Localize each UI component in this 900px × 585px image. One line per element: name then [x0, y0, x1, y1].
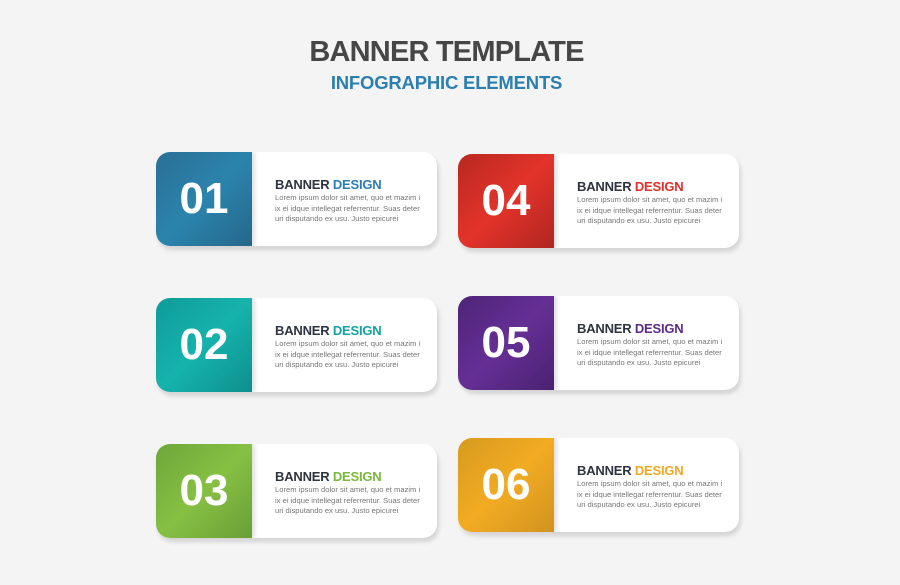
card 02: ix ei idque intellegat referrentur. Suas deter	[275, 350, 420, 358]
card 02: BANNER DESIGN	[275, 323, 381, 338]
card 06: uri disputando ex usu. Justo epicurei	[577, 500, 700, 509]
card 04: uri disputando ex usu. Justo epicurei	[577, 216, 700, 225]
card 04: BANNER DESIGN	[577, 179, 683, 194]
card 04: ix ei idque intellegat referrentur. Suas deter	[577, 206, 722, 214]
card 05: ix ei idque intellegat referrentur. Suas deter	[577, 348, 722, 356]
card 03: ix ei idque intellegat referrentur. Suas deter	[275, 496, 420, 504]
card 06: Lorem ipsum dolor sit amet, quo et mazim i	[577, 479, 722, 488]
card 03: BANNER DESIGN	[275, 469, 381, 484]
card 01: uri disputando ex usu. Justo epicurei	[275, 214, 398, 223]
card 04	[458, 154, 739, 248]
card 03	[156, 444, 437, 538]
card 01	[156, 152, 437, 246]
card 05: Lorem ipsum dolor sit amet, quo et mazim i	[577, 337, 722, 346]
card 03: Lorem ipsum dolor sit amet, quo et mazim i	[275, 485, 420, 494]
card 05: 05	[482, 318, 530, 367]
card 04: 04	[482, 176, 530, 225]
card 02: 02	[180, 320, 228, 369]
card 06	[458, 438, 739, 532]
subtitle: INFOGRAPHIC ELEMENTS	[331, 72, 562, 93]
card 03: 03	[180, 466, 228, 515]
title: BANNER TEMPLATE	[309, 36, 584, 68]
card 05	[458, 296, 739, 390]
card 06: 06	[482, 460, 530, 509]
card 01: Lorem ipsum dolor sit amet, quo et mazim i	[275, 193, 420, 202]
card 01: ix ei idque intellegat referrentur. Suas deter	[275, 204, 420, 212]
card 06: BANNER DESIGN	[577, 463, 683, 478]
card 01: 01	[180, 174, 228, 223]
card 01: BANNER DESIGN	[275, 177, 381, 192]
card 03: uri disputando ex usu. Justo epicurei	[275, 506, 398, 515]
card 06: ix ei idque intellegat referrentur. Suas deter	[577, 490, 722, 498]
card 04: Lorem ipsum dolor sit amet, quo et mazim i	[577, 195, 722, 204]
card 02: uri disputando ex usu. Justo epicurei	[275, 360, 398, 369]
card 05: BANNER DESIGN	[577, 321, 683, 336]
card 02: Lorem ipsum dolor sit amet, quo et mazim i	[275, 339, 420, 348]
card 02	[156, 298, 437, 392]
card 05: uri disputando ex usu. Justo epicurei	[577, 358, 700, 367]
